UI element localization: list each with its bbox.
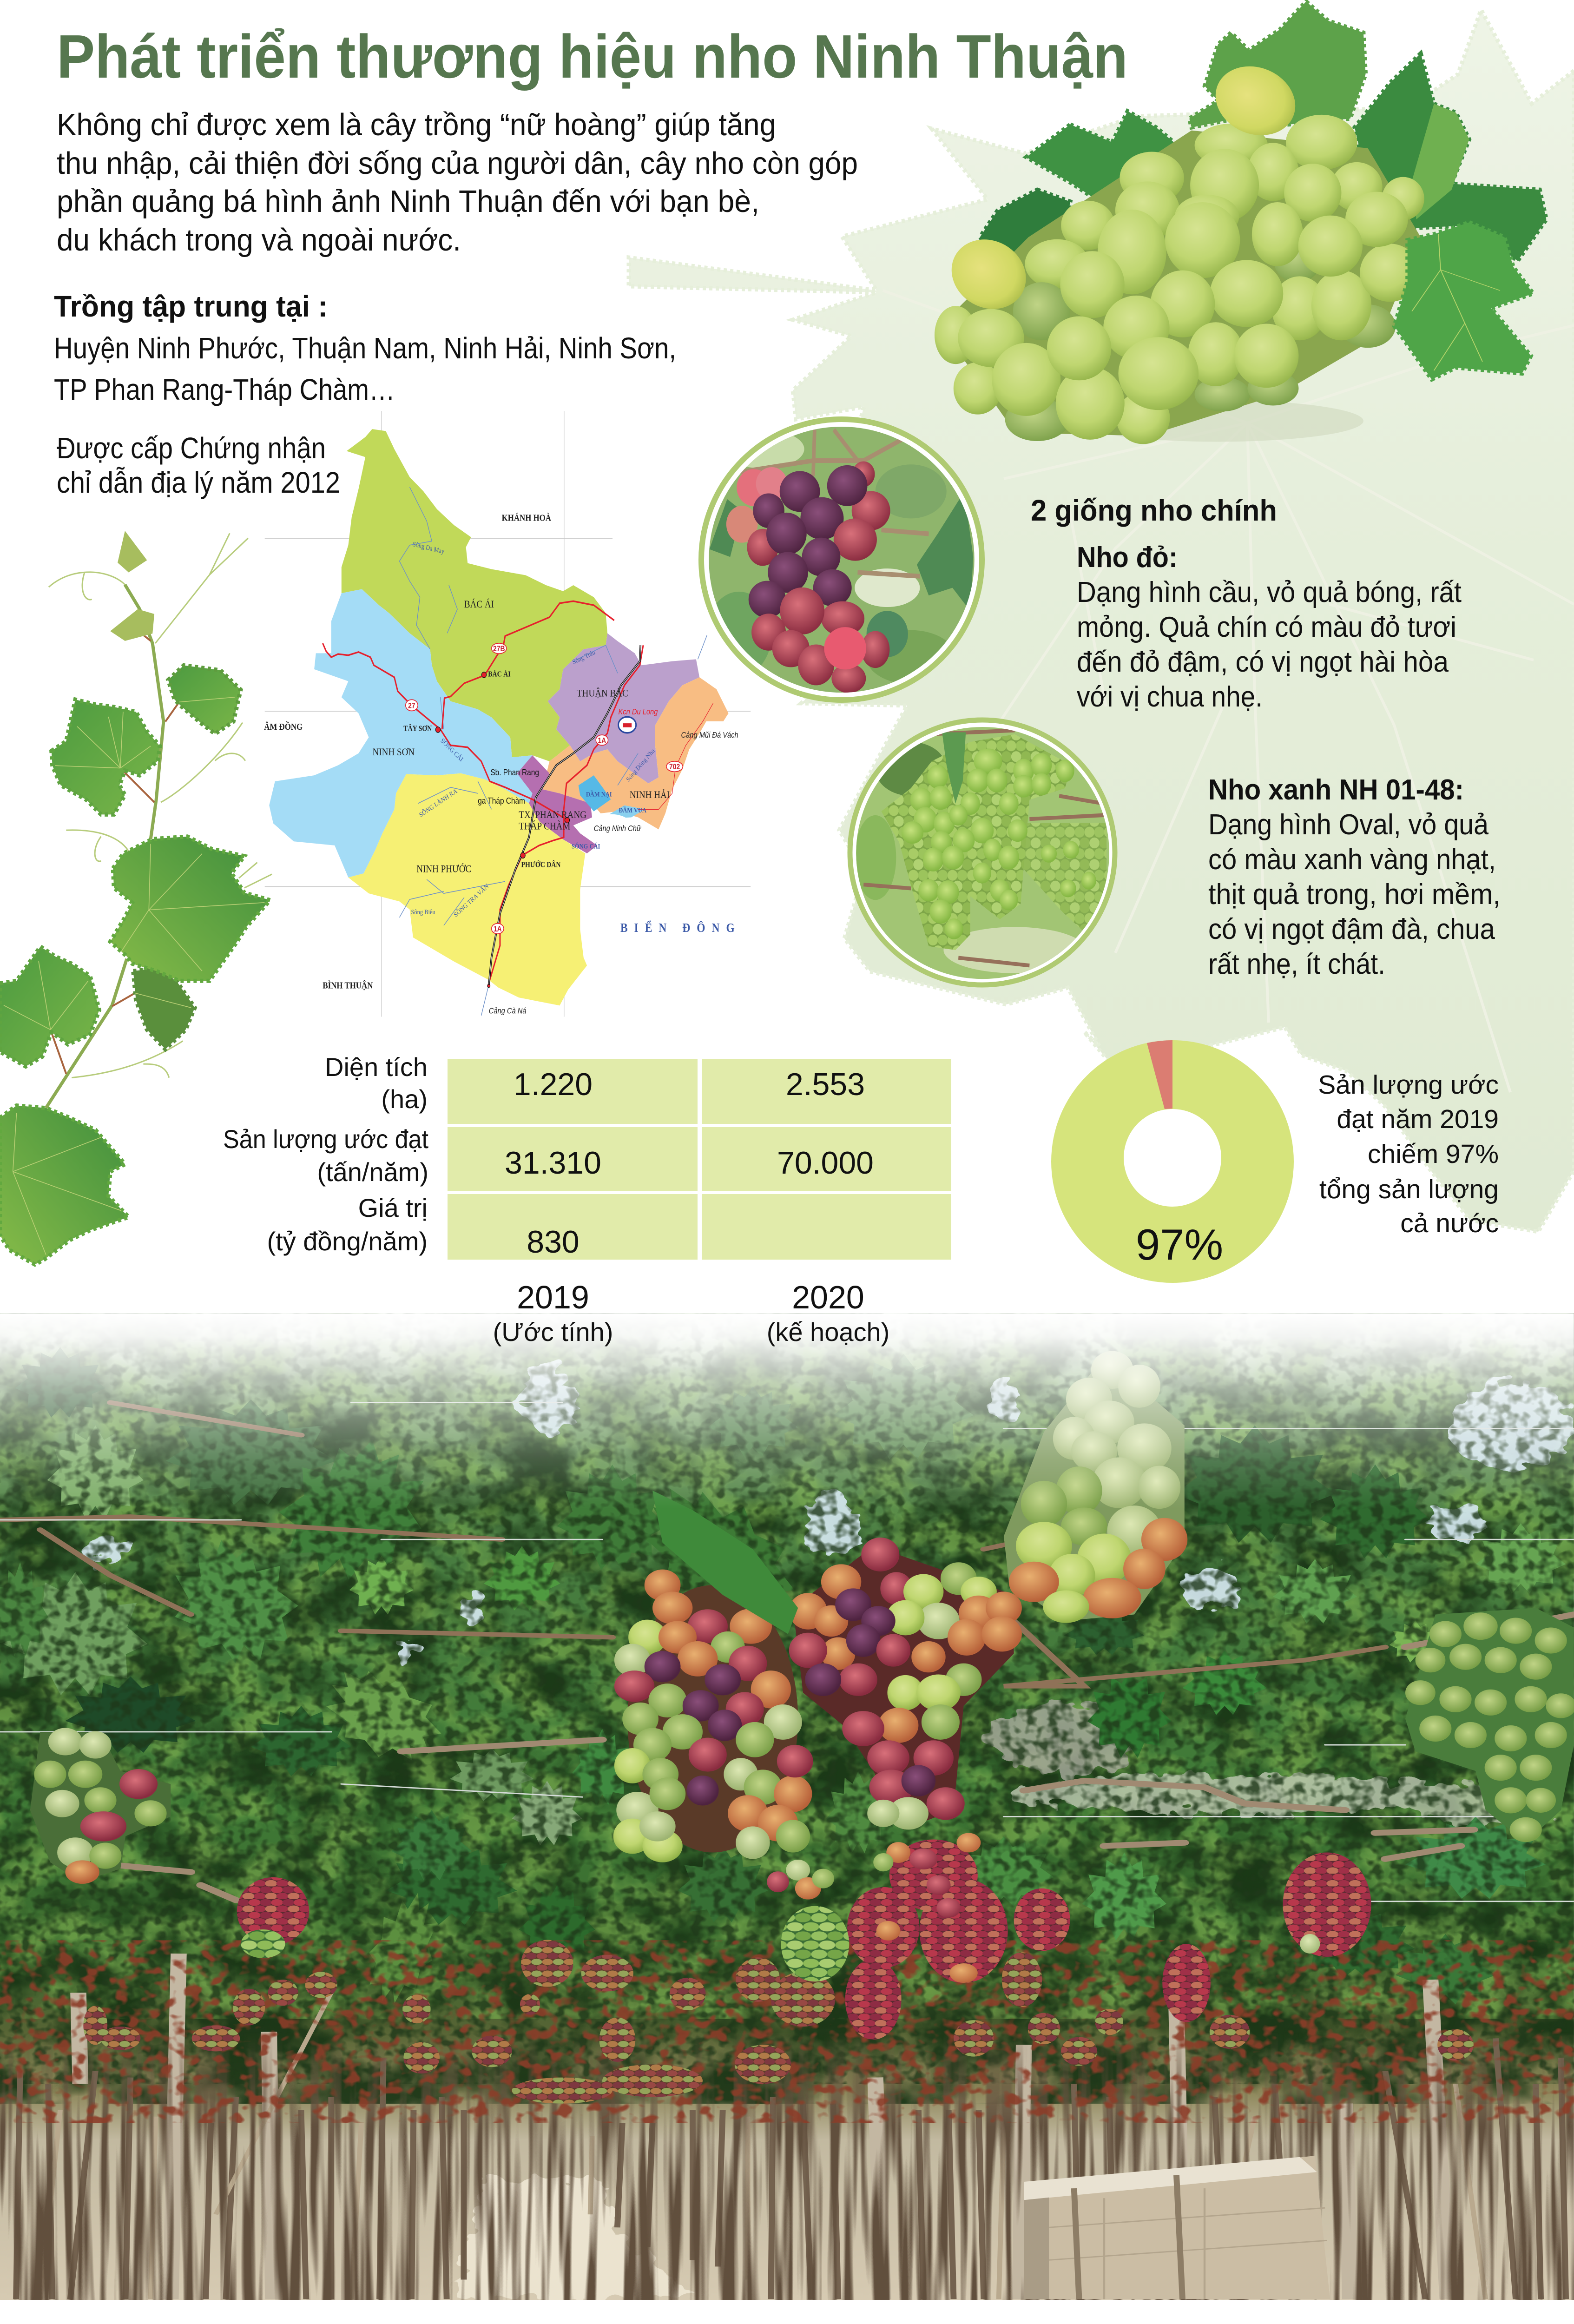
front leaf xyxy=(1394,222,1533,379)
photo circle: red grape variety xyxy=(701,418,982,700)
growing areas text: Trồng tập trung tại : xyxy=(54,290,328,323)
map place labels: ĐẦM NẠI xyxy=(586,790,612,798)
varieties text: red grape: đến đỏ đậm, có vị ngọt hài hòa xyxy=(1077,646,1449,678)
icon: industrial zone xyxy=(619,717,636,733)
varieties text: red grape: với vị chua nhẹ. xyxy=(1077,681,1263,713)
table: column years: 2019 xyxy=(517,1279,589,1315)
varieties text: green grape: Nho xanh NH 01-48: xyxy=(1208,774,1464,806)
map place labels: SÔNG CÁI xyxy=(440,736,465,763)
table: row labels: (tấn/năm) xyxy=(317,1157,428,1187)
table: values: 31.310 xyxy=(505,1145,601,1181)
map place labels: Cảng Mũi Đá Vách xyxy=(681,731,738,739)
grapes xyxy=(936,61,1423,443)
road shields: 702 xyxy=(669,763,680,771)
region: Ninh Phuoc xyxy=(348,773,587,1005)
intro paragraph: Không chỉ được xem là cây trồng “nữ hoàng” giúp tăng xyxy=(57,107,776,142)
table: data cells xyxy=(448,1059,951,1260)
road shields: 27 xyxy=(408,701,415,710)
region: Ninh Son xyxy=(269,589,533,878)
varieties text: heading: 2 giống nho chính xyxy=(1031,494,1277,527)
map of Ninh Thuan province xyxy=(264,411,751,1017)
varieties text: red grape: Nho đỏ: xyxy=(1077,541,1178,574)
map place labels: PHƯỚC DÂN xyxy=(521,860,560,869)
table: row labels: (tỷ đồng/năm) xyxy=(267,1227,428,1256)
large leaf over cluster xyxy=(652,1491,798,1634)
photo circle: green grape variety xyxy=(850,720,1119,985)
table: column years: (Ước tính) xyxy=(493,1317,613,1347)
donut chart: 97 percent: 97% xyxy=(1136,1220,1223,1269)
map place labels: TX. PHAN RANG xyxy=(519,809,586,821)
right and left green clusters xyxy=(30,1608,1574,1981)
donut chart: 97 percent xyxy=(1051,1040,1294,1283)
region: Bac Ai xyxy=(342,429,607,761)
map place labels: NINH SƠN xyxy=(373,746,415,758)
growing areas text: TP Phan Rang-Tháp Chàm… xyxy=(54,373,395,406)
donut caption: Sản lượng ước xyxy=(1318,1070,1499,1100)
varieties text: red grape: mỏng. Quả chín có màu đỏ tươi xyxy=(1077,611,1456,643)
table: column years: 2020 xyxy=(792,1279,864,1315)
map place labels xyxy=(264,512,738,1016)
icon: grape vine sprig xyxy=(0,531,272,1265)
varieties text: green grape: rất nhẹ, ít chát. xyxy=(1208,948,1385,980)
map place labels: THÁP CHÀM xyxy=(519,820,570,832)
right green cluster grapes xyxy=(1408,1614,1573,1840)
table: row labels: (ha) xyxy=(381,1084,428,1114)
foreground leaves xyxy=(0,1347,1566,2006)
concrete wall xyxy=(1024,2156,1330,2299)
railway xyxy=(489,645,640,985)
top right grape cluster xyxy=(1004,1353,1185,1621)
map place labels: TÂY SƠN xyxy=(403,724,432,733)
photo: vineyard with hanging grapes xyxy=(0,1301,1574,2300)
map place labels: ga Tháp Chàm xyxy=(478,796,525,806)
distant hanging clusters xyxy=(83,1940,1474,2104)
growing areas text xyxy=(54,290,676,406)
varieties text: green grape: có vị ngọt đậm đà, chua xyxy=(1208,913,1495,945)
central grape cluster A xyxy=(616,1571,810,1860)
background: large pale grape leaf xyxy=(629,10,1574,1232)
certification text: Được cấp Chứng nhận xyxy=(57,431,326,465)
map place labels: BIỂN ĐÔNG xyxy=(620,920,735,935)
map place labels: Sông Da May xyxy=(412,540,445,555)
intro paragraph: thu nhập, cải thiện đời sống của người dân, cây nho còn góp xyxy=(57,146,858,181)
bunch core xyxy=(940,131,1421,436)
varieties text: green grape: thịt quả trong, hơi mềm, xyxy=(1208,878,1501,911)
varieties text: green grape xyxy=(1208,774,1501,980)
map place labels: Cảng Cà Ná xyxy=(489,1007,527,1016)
donut caption: đạt năm 2019 xyxy=(1337,1104,1499,1134)
map place labels: Sông Trâu xyxy=(572,648,596,666)
varieties text: red grape xyxy=(1077,541,1462,713)
intro paragraph: phần quảng bá hình ảnh Ninh Thuận đến với bạn bè, xyxy=(57,184,759,219)
top white fade xyxy=(0,1313,1574,1509)
varieties text: green grape: có màu xanh vàng nhạt, xyxy=(1208,844,1496,876)
map place labels: BÌNH THUẬN xyxy=(323,980,373,990)
donut caption xyxy=(1318,1070,1499,1238)
road shields: 27B xyxy=(493,645,505,653)
rivers xyxy=(400,487,707,1016)
region: Phan Rang xyxy=(517,755,597,853)
table: row labels: Sản lượng ước đạt xyxy=(223,1124,428,1154)
table: values: 830 xyxy=(527,1224,580,1260)
map place labels: NINH HẢI xyxy=(630,789,670,801)
intro paragraph xyxy=(57,107,858,257)
map place labels: NINH PHƯỚC xyxy=(416,863,471,875)
reddish speckle of distant grapes xyxy=(0,1941,1574,2123)
lower centre cluster grapes xyxy=(767,1833,1320,1983)
table: values xyxy=(505,1067,874,1260)
map place labels: Sông Biêu xyxy=(411,908,435,916)
varieties text: red grape: Dạng hình cầu, vỏ quả bóng, rất xyxy=(1077,576,1462,608)
map place labels: SÔNG TRA VĂN xyxy=(452,882,490,918)
photo: green grape bunch with leaves xyxy=(936,1,1546,443)
map place labels: KHÁNH HOÀ xyxy=(502,512,552,523)
table: row labels: Giá trị xyxy=(358,1193,428,1222)
poles and trunks xyxy=(16,1954,1566,2299)
map place labels: Cảng Ninh Chữ xyxy=(594,825,642,833)
lagoons and bay xyxy=(579,775,645,838)
donut caption: chiếm 97% xyxy=(1368,1139,1499,1169)
certification text xyxy=(57,431,340,499)
trunk-zone streak texture xyxy=(0,2032,1574,2300)
central grape cluster B xyxy=(792,1539,1019,1829)
branches and wires xyxy=(0,1402,1574,1901)
region: Ninh Hai xyxy=(543,677,729,829)
road shields: 1A xyxy=(598,736,606,745)
table: values: 1.220 xyxy=(514,1067,593,1102)
map grid lines xyxy=(265,411,751,1017)
photo base tones xyxy=(0,1301,1574,2300)
table: values: 2.553 xyxy=(786,1067,865,1102)
grape shadow xyxy=(1073,400,1363,442)
varieties text: green grape: Dạng hình Oval, vỏ quả xyxy=(1208,809,1488,841)
road network xyxy=(323,601,713,985)
growing areas text: Huyện Ninh Phước, Thuận Nam, Ninh Hải, Ninh Sơn, xyxy=(54,331,676,365)
region: Thuan Bac xyxy=(548,633,699,783)
table: values: 70.000 xyxy=(777,1145,874,1181)
donut caption: cả nước xyxy=(1400,1208,1499,1238)
table: column years: (kế hoạch) xyxy=(767,1317,889,1347)
ground path xyxy=(452,2179,692,2299)
canopy mottling xyxy=(0,1301,1574,2104)
table: row labels: Diện tích xyxy=(325,1052,428,1082)
donut caption: tổng sản lượng xyxy=(1319,1175,1499,1204)
map place labels: SÔNG LÀNH RA xyxy=(418,786,458,819)
table: column years xyxy=(493,1279,889,1347)
map place labels: BÁC ÁI xyxy=(464,599,494,610)
leaves behind bunch xyxy=(980,1,1546,276)
map place labels: Kcn Du Long xyxy=(619,708,658,716)
left green cluster grapes xyxy=(37,1730,164,1882)
map place labels: ÂM ĐỒNG xyxy=(264,721,303,732)
map markers xyxy=(435,672,570,988)
title: Phát triển thương hiệu nho Ninh Thuận xyxy=(57,22,1128,91)
distant hills and light gaps xyxy=(989,1703,1556,1826)
map place labels: BÁC ÁI xyxy=(488,670,511,679)
sky patches xyxy=(86,1363,1573,1667)
road shields xyxy=(406,643,683,934)
road shields: 1A xyxy=(494,925,502,933)
map place labels: SÔNG CÁI xyxy=(572,842,600,850)
map place labels: Sông Đông Nha xyxy=(625,747,656,783)
map place labels: THUẬN BẮC xyxy=(577,687,628,699)
map place labels: ĐẦM VUA xyxy=(619,806,646,814)
certification text: chỉ dẫn địa lý năm 2012 xyxy=(57,466,340,499)
map place labels: Sb. Phan Rang xyxy=(490,768,539,777)
leaf fine texture xyxy=(0,1301,1574,2084)
intro paragraph: du khách trong và ngoài nước. xyxy=(57,223,461,257)
table: row labels xyxy=(223,1052,428,1256)
